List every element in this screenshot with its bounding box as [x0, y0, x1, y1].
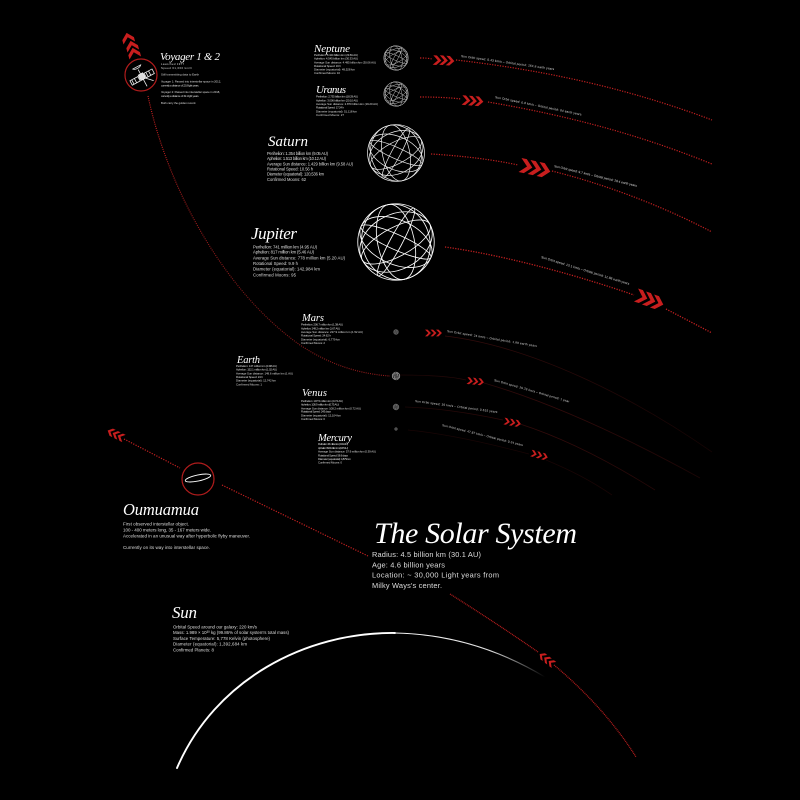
text: mercury facts: Average Sun distance: 57.9 million km (0.39 AU)	[318, 450, 376, 454]
text: oumuamua facts: 100 - 400 meters long, 35 - 167 meters wide.	[123, 528, 211, 532]
trajectory: solar system motion	[450, 594, 636, 757]
text: oumuamua facts: Accelerated in an unusual way after hyperbolic flyby maneuver.	[123, 533, 250, 538]
icon: mars globe	[393, 329, 399, 335]
text: voyager facts: Still transmitting data to Earth	[161, 72, 199, 76]
text: saturn facts: Perihelion: 1.354 billion km (9.05 AU)	[267, 151, 329, 156]
icon: neptune globe	[381, 43, 411, 73]
text: mercury facts: Confirmed Moons: 0	[318, 460, 342, 464]
text: sun facts: Diameter (equatorial): 1,392,684 km	[173, 642, 247, 646]
text: voyager facts: Launched 1977	[161, 62, 184, 66]
text: solar system facts: Location: ~ 30,000 Light years from	[372, 570, 499, 580]
text: solar system facts: Radius: 4.5 billion km (30.1 AU)	[372, 550, 481, 559]
text: earth facts: Diameter (equatorial): 12,742 km	[236, 379, 277, 383]
text: earth facts: Average Sun distance: 149.6 million km (1 AU)	[236, 371, 293, 375]
label: venus orbit: Sun Orbit speed: 35 km/s – Orbital period: 0.615 years	[415, 399, 498, 414]
orbit: uranus	[420, 95, 712, 164]
heading: uranus: Uranus	[316, 84, 346, 96]
text: voyager facts: currently a distance of 19.1 light years.	[161, 94, 199, 98]
text: mars facts	[301, 323, 363, 345]
chevrons: venus	[503, 418, 521, 427]
label: uranus orbit: Sun Orbit speed: 6.8 km/s – Orbital period: 84 earth years	[495, 95, 582, 117]
orbit: earth	[400, 375, 700, 478]
chevrons: mercury	[530, 450, 549, 461]
text: sun facts: Mass: 1.989 × 10³⁰ kg (99.86% of solar system's total mass)	[173, 630, 290, 635]
panel: uranus	[316, 79, 411, 117]
text: mercury facts: Aphelion: 69.8 million km (0.47 AU)	[318, 446, 348, 450]
sun limb arc	[177, 633, 545, 768]
text: uranus facts: Perihelion: 2.735 billion km (18.29 AU)	[316, 95, 358, 99]
text: saturn facts	[267, 151, 354, 182]
text: mercury facts: Diameter (equatorial): 4,879 km	[318, 457, 352, 461]
orbit: venus	[405, 399, 655, 490]
orbit: saturn	[431, 154, 712, 232]
text: solar system facts: Milky Ways's center.	[372, 581, 442, 590]
title: The Solar System	[374, 517, 577, 550]
panel: jupiter	[251, 195, 443, 289]
text: oumuamua facts	[123, 522, 250, 550]
heading: earth: Earth	[236, 355, 260, 366]
orbit: jupiter	[445, 247, 712, 333]
text: mars facts: Aphelion: 249.2 million km (1.67 AU)	[301, 326, 340, 330]
text: venus facts: Confirmed Moons: 0	[301, 417, 325, 421]
voyager trajectory	[148, 96, 390, 376]
text: jupiter facts: Perihelion: 741 million km (4.95 AU)	[253, 244, 318, 249]
text: neptune facts: Confirmed Moons: 16	[314, 71, 340, 75]
text: uranus facts: Confirmed Moons: 27	[316, 113, 344, 117]
text: solar system facts	[372, 550, 499, 590]
text: jupiter facts: Confirmed Moons: 95	[253, 272, 297, 278]
text: neptune facts	[314, 53, 376, 75]
text: jupiter facts: Average Sun distance: 778 million km (5.20 AU)	[253, 255, 346, 260]
text: voyager facts: Speed 61,000 km/h	[161, 66, 192, 70]
label: mercury orbit: Sun Orbit speed: 47.87 km/s – Orbital period: 0.24 years	[442, 423, 524, 447]
text: neptune facts: Diameter (equatorial): 49,528 km	[314, 68, 356, 72]
text: saturn facts: Average Sun distance: 1.429 billion km (9.58 AU)	[267, 161, 354, 166]
text: jupiter facts: Diameter (equatorial): 142,984 km	[253, 267, 320, 272]
text: venus facts: Rotational Speed: 243 days	[301, 410, 332, 414]
icon: oumuamua badge	[182, 463, 214, 495]
icon: earth globe	[391, 371, 401, 381]
panel: saturn	[267, 118, 431, 188]
text: voyager facts: Both carry the golden record.	[161, 101, 196, 105]
panel: sun	[172, 603, 545, 768]
text: jupiter facts: Rotational Speed: 9.9 h	[253, 261, 299, 266]
text: mars facts: Diameter (equatorial): 6,779 km	[301, 337, 341, 341]
label: jupiter orbit: Sun Orbit speed: 13.1 km/s – Orbital period: 11.86 earth years	[541, 255, 630, 286]
text: mars facts: Average Sun distance: 227.9 million km (1.52 AU)	[301, 330, 363, 334]
text: mars facts: Perihelion: 206.7 million km (1.38 AU)	[301, 323, 343, 327]
trajectory: oumuamua	[124, 439, 368, 556]
text: mercury facts: Perihelion: 46 million km (0.31 AU)	[318, 442, 348, 446]
heading: venus: Venus	[302, 388, 327, 399]
heading: mars: Mars	[301, 313, 324, 324]
text: uranus facts: Aphelion: 3.006 billion km (20.10 AU)	[316, 98, 358, 102]
text: neptune facts: Average Sun distance: 4.495 billion km (30.06 AU)	[314, 60, 376, 64]
text: saturn facts: Aphelion: 1.513 billion km (10.12 AU)	[267, 156, 327, 161]
text: earth facts: Rotational Speed: 24 h	[236, 375, 263, 379]
icon: uranus globe	[381, 79, 411, 109]
chevrons: jupiter	[634, 289, 665, 311]
heading: neptune: Neptune	[313, 43, 350, 55]
text: mercury facts	[318, 442, 376, 464]
label: saturn orbit: Sun Orbit speed: 9.7 km/s – Orbital period: 29.4 earth years	[554, 164, 638, 188]
icon: mercury globe	[394, 427, 398, 431]
text: venus facts: Aphelion: 108.9 million km (0.73 AU)	[301, 403, 339, 407]
text: oumuamua facts: Currently on its way into interstellar space.	[123, 545, 210, 550]
panel: neptune	[313, 43, 411, 75]
text: neptune facts: Perihelion: 4.444 billion km (29.81 AU)	[314, 53, 358, 57]
label: mars orbit: Sun Orbit speed: 24 km/s – Orbital period: 1.88 earth years	[447, 329, 538, 348]
heading: voyager: Voyager 1 & 2	[160, 51, 220, 63]
text: mercury facts: Rotational Speed: 58.6 days	[318, 453, 349, 457]
chevrons: neptune	[433, 55, 455, 66]
text: sun facts: Surface Temperature: 5,778 Kelvin (photosphere)	[173, 636, 271, 641]
panel: mercury	[317, 427, 398, 464]
text: venus facts: Perihelion: 107.5 million km (0.72 AU)	[301, 399, 343, 403]
heading: jupiter: Jupiter	[251, 224, 297, 243]
text: venus facts: Diameter (equatorial): 12,104 km	[301, 413, 342, 417]
text: jupiter facts: Aphelion: 817 million km (5.46 AU)	[253, 250, 315, 255]
panel: venus	[301, 388, 400, 421]
text: sun facts: Orbital Speed around our galaxy: 220 km/s	[173, 624, 258, 630]
text: saturn facts: Diameter (equatorial): 120,536 km	[267, 172, 325, 177]
chevrons: uranus	[462, 95, 484, 107]
text: mars facts: Rotational Speed: 24.62 h	[301, 334, 331, 338]
icon: voyager direction chevrons	[121, 31, 141, 60]
text: voyager facts: Voyager 2: Passed into interstellar space in 2018,	[161, 90, 220, 94]
chevrons: oumuamua	[106, 427, 126, 442]
panel: mars	[301, 313, 399, 345]
icon: saturn globe	[361, 118, 431, 188]
text: uranus facts: Average Sun distance: 2.870 billion km (19.20 AU)	[316, 102, 378, 106]
text: earth facts: Perihelion: 147 million km (0.98 AU)	[236, 364, 277, 368]
panel: earth	[236, 355, 401, 386]
text: uranus facts: Diameter (equatorial): 51,118 km	[316, 109, 358, 113]
chevrons: saturn	[519, 158, 552, 179]
text: uranus facts: Rotational Speed: 17.24 h	[316, 106, 344, 110]
icon: voyager probe badge	[125, 59, 158, 92]
text: neptune facts: Aphelion: 4.545 billion km (30.33 AU)	[314, 57, 358, 61]
text: sun facts	[173, 624, 290, 652]
text: sun facts: Confirmed Planets: 8	[173, 648, 215, 652]
orbit: mercury	[408, 423, 612, 495]
text: venus facts: Average Sun distance: 108.2 million km (0.72 AU)	[301, 406, 361, 410]
heading: sun: Sun	[172, 603, 197, 622]
text: jupiter facts	[253, 244, 346, 278]
label: earth orbit: Sun Orbit speed: 29.78 km/s – Orbital period: 1 year	[494, 378, 570, 403]
text: solar system facts: Age: 4.6 billion years	[372, 560, 445, 570]
text: saturn facts: Rotational Speed: 10.56 h	[267, 166, 314, 171]
text: uranus facts	[316, 95, 378, 117]
text: mars facts: Confirmed Moons: 2	[301, 341, 325, 345]
text: venus facts	[301, 399, 361, 421]
orbit: mars	[425, 329, 712, 452]
icon: jupiter globe	[349, 195, 443, 289]
text: earth facts: Aphelion: 152.1 million km (1.02 AU)	[236, 368, 277, 372]
heading: oumuamua: Oumuamua	[123, 500, 199, 519]
chevrons: earth	[467, 377, 484, 386]
chevrons: solar system	[537, 651, 556, 668]
text: oumuamua facts: First observed interstellar object.	[123, 522, 189, 526]
text: earth facts: Confirmed Moons: 1	[236, 382, 262, 386]
text: voyager facts: currently a distance of 22.8 light years.	[161, 84, 199, 88]
text: earth facts	[236, 364, 293, 386]
label: neptune orbit: Sun Orbit speed: 5.43 km/s – Orbital period: 164.8 earth years	[461, 54, 555, 71]
text: neptune facts: Rotational Speed: 16 h	[314, 64, 341, 68]
icon: venus globe	[392, 403, 400, 411]
text: voyager facts: Voyager 1: Passed into interstellar space in 2012,	[161, 80, 221, 84]
text: voyager facts	[161, 62, 221, 105]
chevrons: mars	[425, 330, 442, 336]
orbit: neptune	[420, 54, 712, 120]
text: saturn facts: Confirmed Moons: 62	[267, 177, 307, 182]
heading: mercury: Mercury	[317, 433, 352, 444]
heading: saturn: Saturn	[268, 134, 308, 150]
panel: oumuamua	[106, 427, 368, 556]
panel: voyager	[121, 31, 221, 105]
